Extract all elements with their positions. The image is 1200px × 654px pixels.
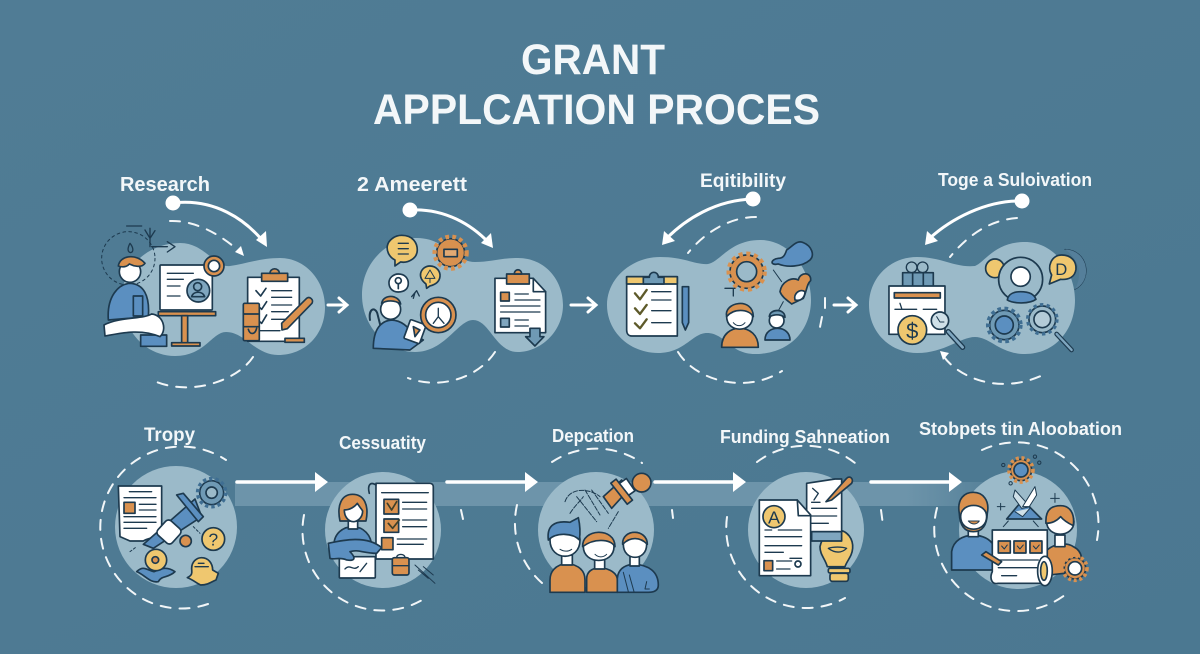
blob background	[362, 238, 563, 352]
icon: ideas, person and document	[370, 235, 546, 350]
dashed ring	[934, 442, 1098, 611]
arrow: step 3 to 4	[834, 298, 856, 312]
icon: budget, magnifier and team: D	[1055, 260, 1067, 279]
dashed ring	[726, 446, 883, 608]
title	[373, 36, 820, 134]
circle background	[959, 471, 1077, 589]
panel: Stobpets tin Aloobation	[919, 419, 1122, 611]
arrow: step 2 to 3	[571, 298, 596, 312]
circle background	[538, 472, 654, 588]
panel: Research	[102, 174, 325, 387]
icon: budget, magnifier and team	[889, 249, 1086, 350]
arrow: dashed	[678, 217, 825, 383]
heading: Depcation	[552, 426, 634, 446]
dashed ring	[515, 449, 673, 583]
circle background	[325, 472, 441, 588]
heading: Cessuatity	[339, 433, 426, 453]
arrow: curved solid	[662, 192, 760, 245]
panel: Eqitibility	[607, 171, 825, 383]
blob background	[122, 243, 325, 356]
panel: Cessuatity	[302, 433, 463, 611]
panel: Toge a Suloivation	[869, 170, 1092, 384]
heading: Stobpets tin Aloobation	[919, 419, 1122, 439]
dashed ring	[302, 510, 463, 611]
icon: documents, pencil and bulb: A	[768, 507, 780, 527]
title: APPLCATION PROCES	[373, 86, 820, 134]
icon: researcher at board	[102, 226, 313, 346]
icon: budget, magnifier and team: $	[906, 318, 918, 343]
blob background	[869, 242, 1075, 354]
dashed ring	[100, 447, 226, 609]
heading: Tropy	[144, 425, 195, 446]
arrow: step 1 to 2	[328, 298, 347, 312]
heading: Research	[120, 174, 210, 196]
heading: 2 Ameerett	[357, 174, 467, 196]
panel: Tropy	[100, 425, 237, 609]
icon: documents, tools and questions: ?	[208, 530, 218, 550]
arrow: step 7 to 8	[655, 472, 746, 492]
arrow: curved solid	[166, 196, 267, 247]
circle background	[115, 466, 237, 588]
icon: applicant and checklist	[328, 483, 435, 583]
blob background	[607, 240, 811, 354]
title: GRANT	[521, 36, 665, 84]
arrow: dashed	[408, 352, 495, 383]
icon: checklist, gear and applicants	[627, 242, 812, 347]
panel: Funding Sahneation	[720, 427, 890, 608]
heading: Funding Sahneation	[720, 427, 890, 447]
icon: documents, pencil and bulb	[759, 477, 853, 581]
arrow: curved solid	[402, 202, 493, 248]
icon: team and stamp	[548, 473, 658, 592]
arrow: dashed	[940, 218, 1043, 384]
arrow: curved dashed	[152, 221, 253, 387]
icon: documents, tools and questions	[118, 479, 226, 585]
panel: step 2	[357, 174, 563, 383]
arrow: curved solid	[925, 194, 1030, 245]
connector band	[235, 482, 1025, 506]
circle background	[748, 472, 864, 588]
heading: Toge a Suloivation	[938, 170, 1092, 190]
arrow: step 6 to 7	[447, 472, 538, 492]
heading: Eqitibility	[700, 171, 786, 192]
arrow: step 8 to 9	[871, 472, 962, 492]
icon: team review with checklist	[952, 455, 1087, 586]
panel: Depcation	[515, 426, 673, 592]
arrow: step 5 to 6	[237, 472, 328, 492]
